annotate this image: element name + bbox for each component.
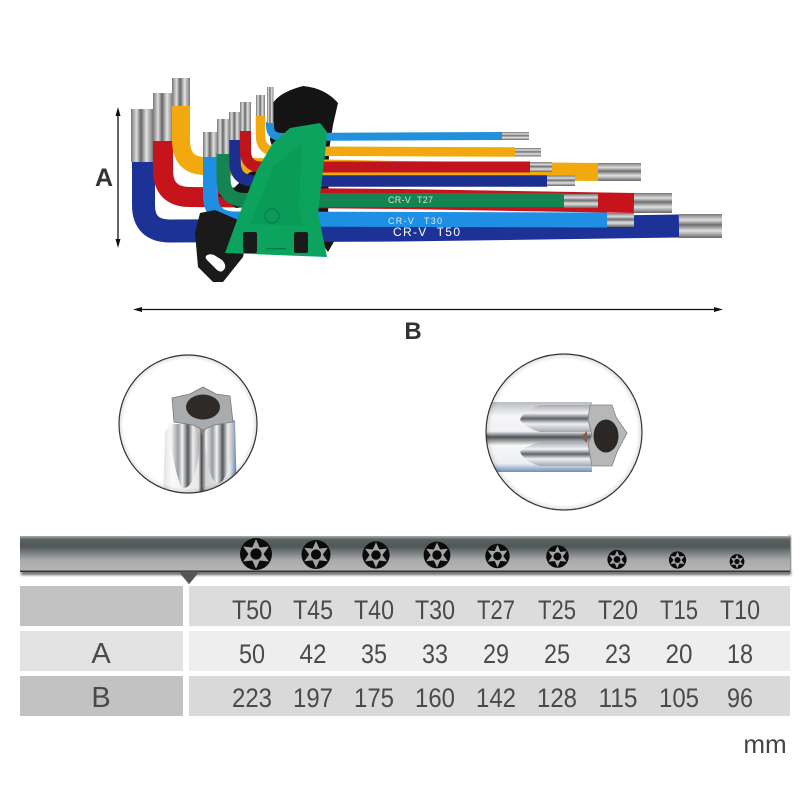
torx profile T30 [424,542,450,568]
row: B [91,682,753,714]
key: T27 green [217,119,598,208]
key: T20 red [240,102,552,172]
row: B: 160 [415,683,455,713]
dimension arrow B [133,307,723,312]
torx profile T40 [362,541,390,569]
dimension arrow A [116,107,120,248]
row: A [91,638,753,670]
torx profile T27 [485,544,510,568]
row: sizes: T40 [354,595,394,625]
row backgrounds [20,586,790,716]
dimensions table [20,586,790,716]
torx profile T10 [730,554,744,569]
row: B: 105 [659,683,699,713]
torx profile T20 [607,550,627,569]
key: T10 blue [267,87,529,140]
row: B: 128 [537,683,577,713]
unit label: mm [743,729,787,759]
row: A: 50 [239,639,265,669]
row: B: 115 [598,683,638,713]
torx profile T15 [669,551,686,569]
row: sizes: T45 [293,595,333,625]
detail circle: tip front view [119,355,257,500]
row: B: 223 [232,683,272,713]
row: sizes: T30 [415,595,455,625]
key: T30 light blue [203,132,634,227]
key: T50 navy [131,109,722,238]
row: A: A [91,638,111,670]
row: B: 175 [354,683,394,713]
product photo: torx key set [131,78,722,282]
shadow between small keys [218,170,262,208]
black holder back [270,86,338,252]
row: B: B [91,682,111,714]
detail circle: tip side view [480,354,642,510]
pointer notch [179,572,199,584]
label A: A [95,164,113,192]
torx profile T45 [302,540,330,569]
key: T15 yellow [256,95,541,156]
green holder clip [225,123,327,257]
engraved labels: CR-V T30 [388,216,442,226]
black holder hang tab [195,210,250,282]
label B: B [404,318,422,345]
engraved labels: CR-V T50 [393,225,460,239]
row: sizes: T50 [232,595,272,625]
header bar with torx profiles [20,536,791,584]
key: T25 navy [229,112,575,186]
row: A: 33 [422,639,448,669]
row: sizes: T25 [538,595,576,625]
row: sizes: T10 [720,595,760,625]
row: sizes [232,595,760,625]
row: sizes: T27 [477,595,515,625]
row: A: 23 [605,639,631,669]
row: A: 42 [300,639,326,669]
row: B: 96 [727,683,753,713]
row: B: 197 [293,683,333,713]
torx profile T50 [240,538,272,570]
row: A: 25 [544,639,570,669]
key: T40 yellow [172,78,641,181]
row: sizes: T20 [598,595,638,625]
row: A: 29 [483,639,509,669]
row: A: 35 [361,639,387,669]
row: B: 142 [476,683,516,713]
hang hole [206,254,225,272]
engraved labels: CR-V T27 [388,195,433,205]
torx profile T25 [546,545,569,568]
engraved labels [388,195,460,239]
row: sizes: T15 [660,595,698,625]
row: A: 20 [666,639,692,669]
row: A: 18 [727,639,753,669]
key: T45 red [153,93,672,213]
